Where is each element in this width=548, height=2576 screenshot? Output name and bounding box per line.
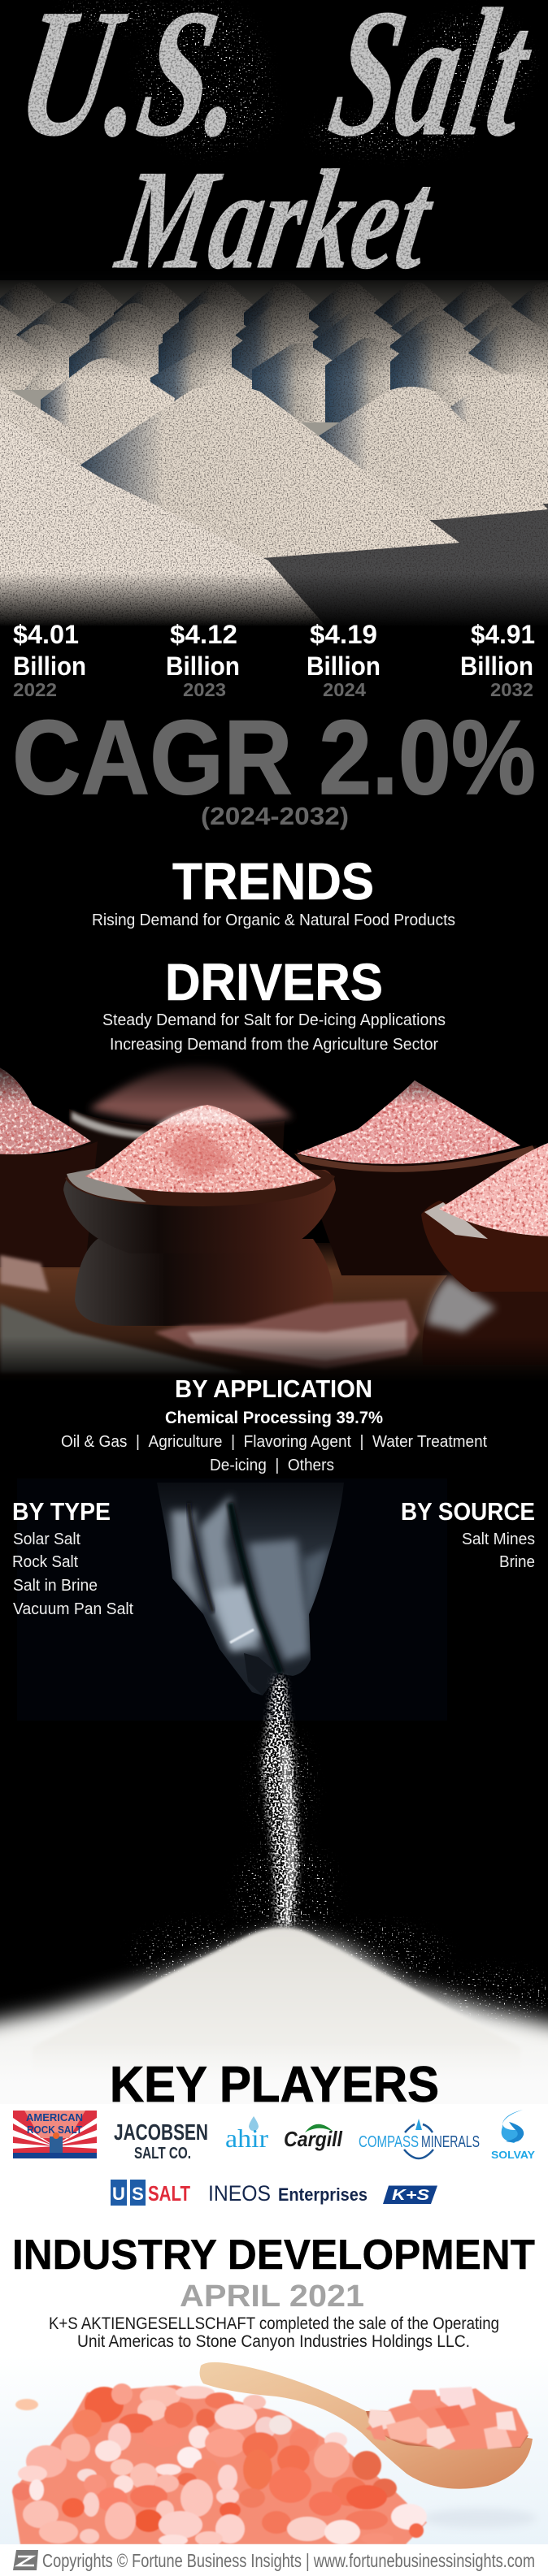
stat 2022: Billion bbox=[13, 652, 86, 681]
list bbox=[462, 1530, 535, 1571]
stat 2022: $4.01 bbox=[13, 620, 79, 649]
footer bbox=[13, 2550, 535, 2571]
right front bowl bbox=[421, 1141, 548, 1365]
stat 2023: 2023 bbox=[183, 679, 226, 700]
drivers text bbox=[102, 1011, 446, 1054]
heading: BY SOURCE bbox=[401, 1497, 535, 1526]
list: Rock Salt bbox=[12, 1553, 78, 1571]
scattered salt bbox=[0, 1255, 419, 1369]
logo: US Salt: SALT bbox=[148, 2181, 190, 2206]
footer logo bbox=[13, 2550, 38, 2570]
logo: Solvay: SOLVAY bbox=[491, 2149, 535, 2161]
stat 2024: $4.19 bbox=[310, 620, 377, 649]
development text: Unit Americas to Stone Canyon Industries Holdings LLC. bbox=[77, 2332, 470, 2351]
segments line 2: De-icing | Others bbox=[210, 1457, 334, 1474]
list: Brine bbox=[499, 1553, 535, 1571]
key players heading: KEY PLAYERS bbox=[110, 2057, 439, 2113]
development text bbox=[49, 2314, 499, 2351]
stat 2032: $4.91 bbox=[471, 620, 535, 649]
CAGR period: (2024-2032) bbox=[201, 802, 349, 830]
logo: Cargill: Cargill bbox=[284, 2127, 343, 2151]
logo: US Salt: U bbox=[112, 2184, 125, 2204]
list bbox=[12, 1530, 133, 1618]
logo: American Rock Salt: AMERICAN bbox=[26, 2111, 83, 2124]
stat 2024: Billion bbox=[307, 652, 381, 681]
logo: American Rock Salt bbox=[13, 2111, 97, 2158]
drivers text: Steady Demand for Salt for De-icing Applications bbox=[102, 1011, 446, 1029]
stat 2023: $4.12 bbox=[170, 620, 237, 649]
stat 2032: Billion bbox=[460, 652, 533, 681]
drivers text: Increasing Demand from the Agriculture Sector bbox=[110, 1036, 438, 1054]
logo: Ineos Enterprises bbox=[208, 2181, 368, 2206]
by source bbox=[401, 1497, 535, 1571]
stat 2032: 2032 bbox=[490, 679, 533, 700]
logo: US Salt bbox=[111, 2180, 190, 2206]
logo: Ineos Enterprises: Enterprises bbox=[278, 2184, 368, 2205]
back bowl bbox=[69, 1063, 293, 1267]
title: U.S. Salt Market bbox=[5, 0, 546, 299]
trends heading: TRENDS bbox=[172, 852, 374, 911]
segments line 1: Oil & Gas | Agriculture | Flavoring Agent | Water Treatment bbox=[61, 1433, 487, 1451]
logo: American Rock Salt: ROCK SALT bbox=[27, 2124, 82, 2136]
by application bbox=[61, 1375, 487, 1474]
panel: white lower section bbox=[0, 2104, 548, 2576]
logo: Jacobsen Salt Co. bbox=[114, 2119, 208, 2163]
stat 2032 bbox=[460, 620, 535, 700]
salt dust around title bbox=[61, 4, 528, 152]
logo: K+S: K+S bbox=[392, 2187, 429, 2203]
heading: BY TYPE bbox=[12, 1497, 111, 1526]
stat 2022 bbox=[13, 620, 86, 700]
photo: salt piles bbox=[0, 269, 548, 627]
logo: Jacobsen Salt Co.: SALT CO. bbox=[134, 2145, 191, 2163]
stat 2024: 2024 bbox=[323, 679, 366, 700]
photo: salt heap bbox=[0, 1927, 548, 2145]
list: Salt in Brine bbox=[13, 1577, 98, 1595]
photo: gloved hand pouring salt bbox=[17, 1478, 548, 2017]
photo: pink salt bowls bbox=[0, 1056, 548, 1383]
wooden table bbox=[0, 1243, 548, 1381]
panel: hero bbox=[0, 0, 548, 627]
glove bbox=[157, 1483, 344, 1695]
salt rock pile bbox=[12, 2383, 427, 2546]
list: Solar Salt bbox=[13, 1530, 80, 1548]
development text: K+S AKTIENGESELLSCHAFT completed the sale of the Operating bbox=[49, 2314, 499, 2333]
list: Vacuum Pan Salt bbox=[13, 1600, 133, 1618]
drivers heading: DRIVERS bbox=[165, 953, 383, 1011]
logo: Ineos Enterprises: INEOS bbox=[208, 2181, 271, 2206]
logo: Compass Minerals: COMPASS bbox=[359, 2133, 419, 2151]
stat 2023: Billion bbox=[166, 652, 240, 681]
logo: ahir: ahir bbox=[225, 2124, 268, 2153]
stat 2022: 2022 bbox=[13, 679, 57, 700]
logo: Compass Minerals bbox=[359, 2119, 480, 2158]
stat 2023 bbox=[166, 620, 240, 700]
top segment: Chemical Processing 39.7% bbox=[165, 1409, 383, 1427]
logo: Jacobsen Salt Co.: JACOBSEN bbox=[114, 2119, 208, 2145]
trends text: Rising Demand for Organic & Natural Food Products bbox=[92, 911, 455, 929]
logo: US Salt: S bbox=[132, 2184, 144, 2204]
stat 2024 bbox=[307, 620, 381, 700]
photo: pink salt and spoon bbox=[0, 2356, 548, 2576]
key player logos bbox=[13, 2110, 535, 2206]
list: Salt Mines bbox=[462, 1530, 535, 1548]
right back bowl bbox=[294, 1080, 537, 1275]
date: APRIL 2021 bbox=[180, 2279, 364, 2314]
central bowl bbox=[63, 1105, 336, 1326]
logo: Compass Minerals: MINERALS bbox=[421, 2133, 480, 2151]
rocks in spoon bbox=[366, 2387, 528, 2450]
logo: K+S bbox=[383, 2185, 437, 2204]
logo: Solvay bbox=[491, 2110, 535, 2161]
spoon bbox=[200, 2362, 533, 2489]
industry development heading: INDUSTRY DEVELOPMENT bbox=[12, 2232, 535, 2279]
heading: BY APPLICATION bbox=[175, 1375, 372, 1403]
by type bbox=[12, 1497, 133, 1618]
market size stats bbox=[13, 620, 535, 700]
salt stream bbox=[134, 1678, 548, 2017]
left bowl bbox=[0, 1064, 98, 1267]
bottom edge of photo bbox=[0, 2544, 548, 2576]
